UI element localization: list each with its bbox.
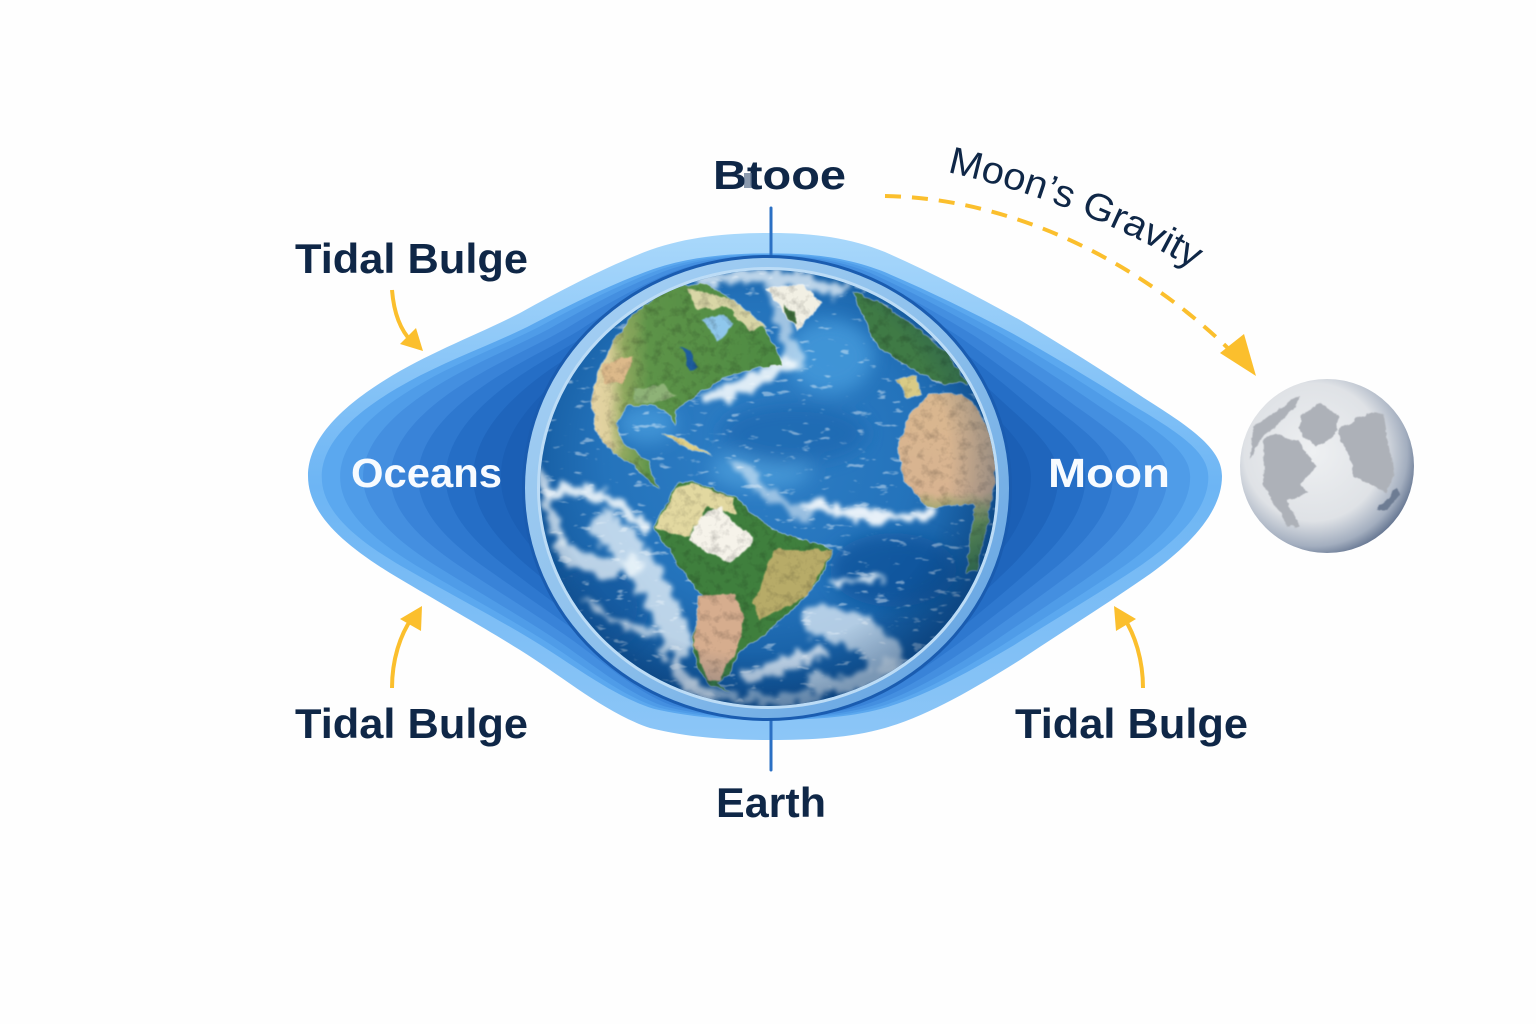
western desert xyxy=(603,357,633,383)
bottom axis tick xyxy=(770,718,772,770)
south america xyxy=(653,482,833,693)
africa xyxy=(897,393,997,573)
limb shading xyxy=(540,270,996,706)
caribbean islands xyxy=(660,433,713,457)
label: moon's gravity: Moon’s Gravity xyxy=(950,147,1204,272)
label: earth: Earth xyxy=(716,779,826,826)
arrow: moon's gravity dashed xyxy=(885,196,1256,376)
ocean flecks xyxy=(540,270,997,707)
label: oceans: Oceans xyxy=(351,450,502,496)
greenland xyxy=(767,285,823,330)
label: tidal bulge bottom right: Tidal Bulge xyxy=(1015,700,1248,747)
label: blurred top label: Btooe xyxy=(713,152,846,198)
moon xyxy=(1240,379,1414,553)
earth globe with ring xyxy=(522,255,1012,721)
ocean light areas xyxy=(543,320,957,650)
label: moon on water: Moon xyxy=(1048,450,1170,496)
arrow: tidal bulge bottom right xyxy=(1114,606,1143,688)
label: tidal bulge top left: Tidal Bulge xyxy=(295,235,528,282)
cloud bands xyxy=(540,277,930,700)
land masses xyxy=(592,284,997,693)
hudson bay xyxy=(702,313,733,343)
north america xyxy=(592,284,783,488)
ocean tidal bulge envelope xyxy=(308,233,1222,740)
label: tidal bulge bottom left: Tidal Bulge xyxy=(295,700,528,747)
infographic: tidal bulges diagram xyxy=(295,147,1414,818)
europe xyxy=(853,292,968,383)
great lakes xyxy=(680,347,697,370)
arrow: tidal bulge top left xyxy=(392,290,423,351)
top axis tick xyxy=(770,208,772,256)
eastern forest light patch xyxy=(633,383,677,403)
north america tundra xyxy=(687,287,767,330)
arrow: tidal bulge bottom left xyxy=(392,606,422,688)
